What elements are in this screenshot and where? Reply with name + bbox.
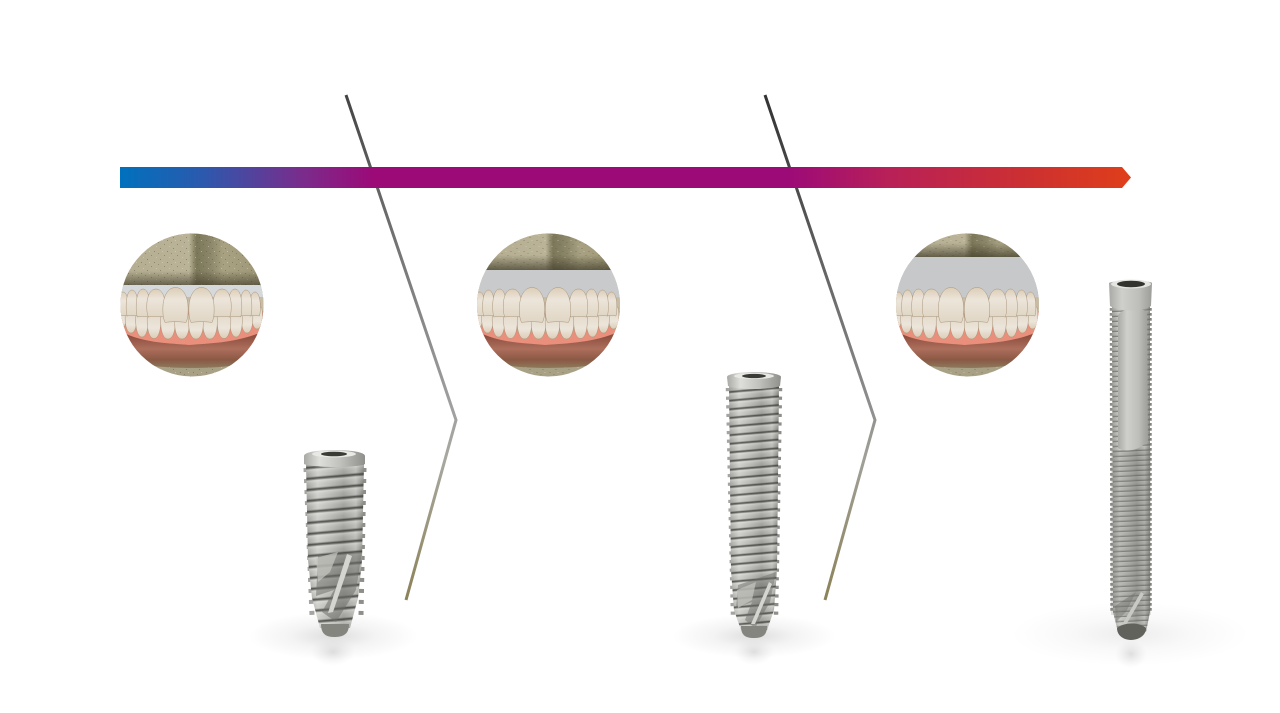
tooth illustration: medium bone gap (472, 233, 620, 377)
tooth illustration: small bone gap (116, 233, 264, 377)
chevron divider 1 (346, 95, 456, 600)
chevron divider 2 (765, 95, 875, 600)
gradient arrow bar (120, 167, 1131, 188)
short implant (248, 450, 418, 666)
tooth illustration: large bone gap (891, 233, 1040, 377)
long implant (1010, 280, 1250, 668)
medium implant (672, 372, 836, 665)
